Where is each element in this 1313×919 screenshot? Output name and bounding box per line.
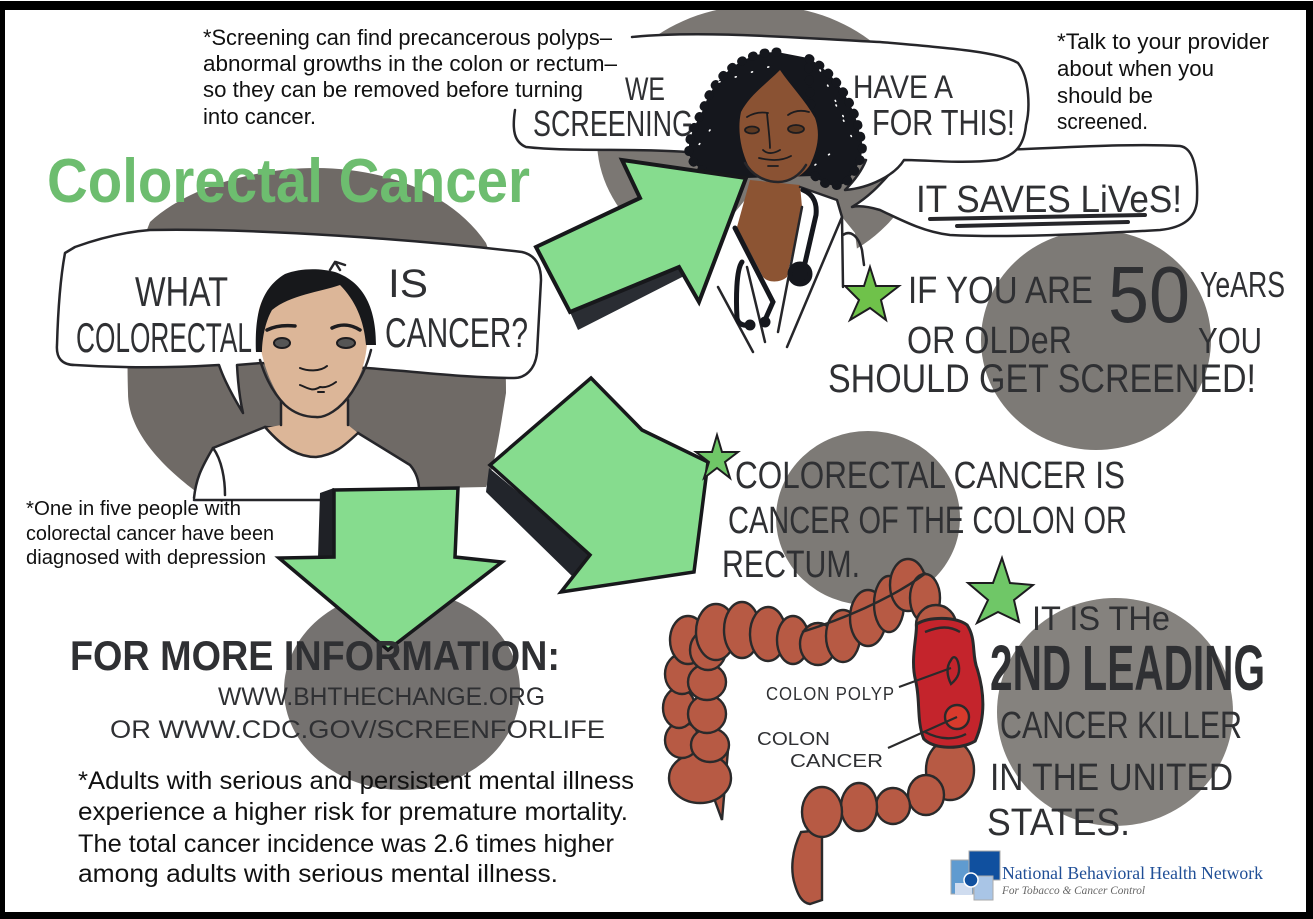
note: serious mental illness: *Adults with serious and persistent mental illness	[78, 767, 634, 795]
note: talk to your provider: screened.	[1057, 109, 1148, 134]
text: it saves lives: IT SAVES LiVeS!	[916, 179, 1182, 221]
text: age screening recommendation	[828, 250, 1285, 401]
rectal end	[700, 750, 728, 820]
note: screening finds polyps: *Screening can find precancerous polyps–	[203, 25, 613, 50]
logo: national behavioral health network	[951, 851, 1263, 900]
note: screening finds polyps	[203, 25, 618, 129]
speech bubble: we have a screening for this: FOR THIS!	[872, 102, 1015, 143]
grey blob: more information background	[284, 590, 520, 790]
note: serious mental illness	[78, 767, 634, 888]
polyp	[948, 657, 959, 684]
ascending segments	[669, 753, 731, 803]
speech bubble: we have a screening for this	[514, 34, 1028, 190]
note: serious mental illness: The total cancer incidence was 2.6 times higher	[78, 830, 614, 858]
text: colorectal cancer definition: RECTUM.	[722, 544, 860, 586]
note: one in five depression: *One in five people with	[26, 498, 241, 520]
more information block	[70, 632, 605, 744]
sigmoid segments	[876, 788, 910, 824]
chest skin	[737, 180, 802, 282]
note: serious mental illness: experience a higher risk for premature mortality.	[78, 798, 628, 826]
descending segments	[926, 740, 974, 800]
note: one in five depression	[26, 498, 274, 569]
stethoscope	[735, 190, 816, 328]
colon labels: COLON	[757, 729, 830, 749]
coat lines	[718, 187, 864, 352]
grey blob: doctor background	[597, 5, 923, 275]
star: age statistic	[845, 267, 899, 320]
logo: national behavioral health network: National Behavioral Health Network	[1002, 863, 1263, 883]
hair highlights	[695, 65, 858, 165]
text: age screening recommendation: IF YOU ARE	[908, 270, 1093, 312]
facial features	[267, 325, 360, 392]
rectum stem	[792, 830, 822, 904]
text: colorectal cancer definition	[722, 455, 1127, 586]
grey blob: second leading background	[997, 598, 1233, 826]
grey blob: age statistic background	[981, 230, 1211, 450]
star: second leading	[968, 558, 1033, 623]
title: Colorectal Cancer	[47, 147, 530, 216]
underline strokes	[930, 215, 1145, 226]
white coat	[700, 187, 862, 352]
colon illustration	[663, 559, 981, 904]
colon labels	[757, 684, 895, 771]
text: second leading cancer killer: IN THE UNITED	[990, 757, 1233, 799]
arrow: up right to doctor	[536, 160, 746, 330]
patient illustration	[57, 230, 541, 500]
speech bubble: what is colorectal cancer	[57, 230, 541, 413]
note: one in five depression: diagnosed with depression	[26, 547, 266, 569]
logo: national behavioral health network: For Tobacco & Cancer Control	[1001, 883, 1146, 897]
diseased section	[915, 620, 981, 746]
arrow: down	[279, 488, 502, 650]
note: screening finds polyps: abnormal growths in the colon or rectum–	[203, 51, 618, 76]
text: age screening recommendation: YeARS	[1200, 264, 1285, 305]
more information block: FOR MORE INFORMATION:	[70, 632, 560, 679]
more information block: OR WWW.CDC.GOV/SCREENFORLIFE	[110, 716, 605, 744]
face	[739, 70, 818, 182]
patient illustration: CANCER?	[385, 309, 528, 356]
star: colon definition	[696, 435, 738, 478]
text: age screening recommendation: OR OLDeR	[907, 320, 1072, 362]
text: colorectal cancer definition: COLORECTAL CANCER IS	[735, 455, 1125, 497]
tumour	[945, 705, 969, 729]
note: serious mental illness: among adults with serious mental illness.	[78, 860, 558, 888]
facial features	[745, 111, 809, 166]
note: talk to your provider: *Talk to your provider	[1057, 29, 1269, 54]
grey blob: colon definition background	[776, 431, 960, 605]
transverse segments	[696, 604, 736, 660]
text: second leading cancer killer: IT IS THe	[1032, 600, 1170, 638]
shirt	[194, 427, 420, 500]
speech bubble: it saves lives	[852, 145, 1197, 236]
hair	[256, 269, 376, 352]
colon labels: COLON POLYP	[766, 684, 895, 704]
colon labels: CANCER	[790, 751, 883, 771]
text: is cancer: IS	[388, 262, 428, 306]
note: talk to your provider: should be	[1057, 83, 1153, 108]
grey blob: patient background	[128, 168, 506, 493]
text: age screening recommendation: YOU	[1198, 320, 1262, 361]
note: talk to your provider: about when you	[1057, 56, 1214, 81]
patient illustration: COLORECTAL	[76, 314, 252, 361]
speech bubble: we have a screening for this: SCREENING	[533, 103, 693, 144]
hair	[689, 52, 862, 186]
note: talk to your provider	[1057, 29, 1269, 134]
text: we screening: WE	[625, 71, 665, 107]
pointer lines	[888, 668, 957, 748]
more information block: WWW.BHTHECHANGE.ORG	[218, 683, 545, 711]
note: screening finds polyps: so they can be removed before turning	[203, 77, 583, 102]
text: colorectal cancer definition: CANCER OF THE COLON OR	[728, 500, 1127, 542]
text: second leading cancer killer: CANCER KILLER	[1000, 705, 1242, 747]
text: second leading cancer killer	[987, 600, 1265, 844]
text: second leading cancer killer: STATES.	[987, 802, 1130, 844]
text: age screening recommendation: 50	[1108, 250, 1190, 339]
text: have a for this: HAVE A	[853, 69, 954, 105]
arrow: right to colon	[486, 378, 708, 592]
head	[258, 276, 368, 417]
neck	[265, 395, 358, 457]
doctor illustration	[689, 52, 864, 352]
note: one in five depression: colorectal cancer have been	[26, 523, 274, 545]
note: screening finds polyps: into cancer.	[203, 104, 316, 129]
text: what colorectal: WHAT	[135, 268, 228, 315]
